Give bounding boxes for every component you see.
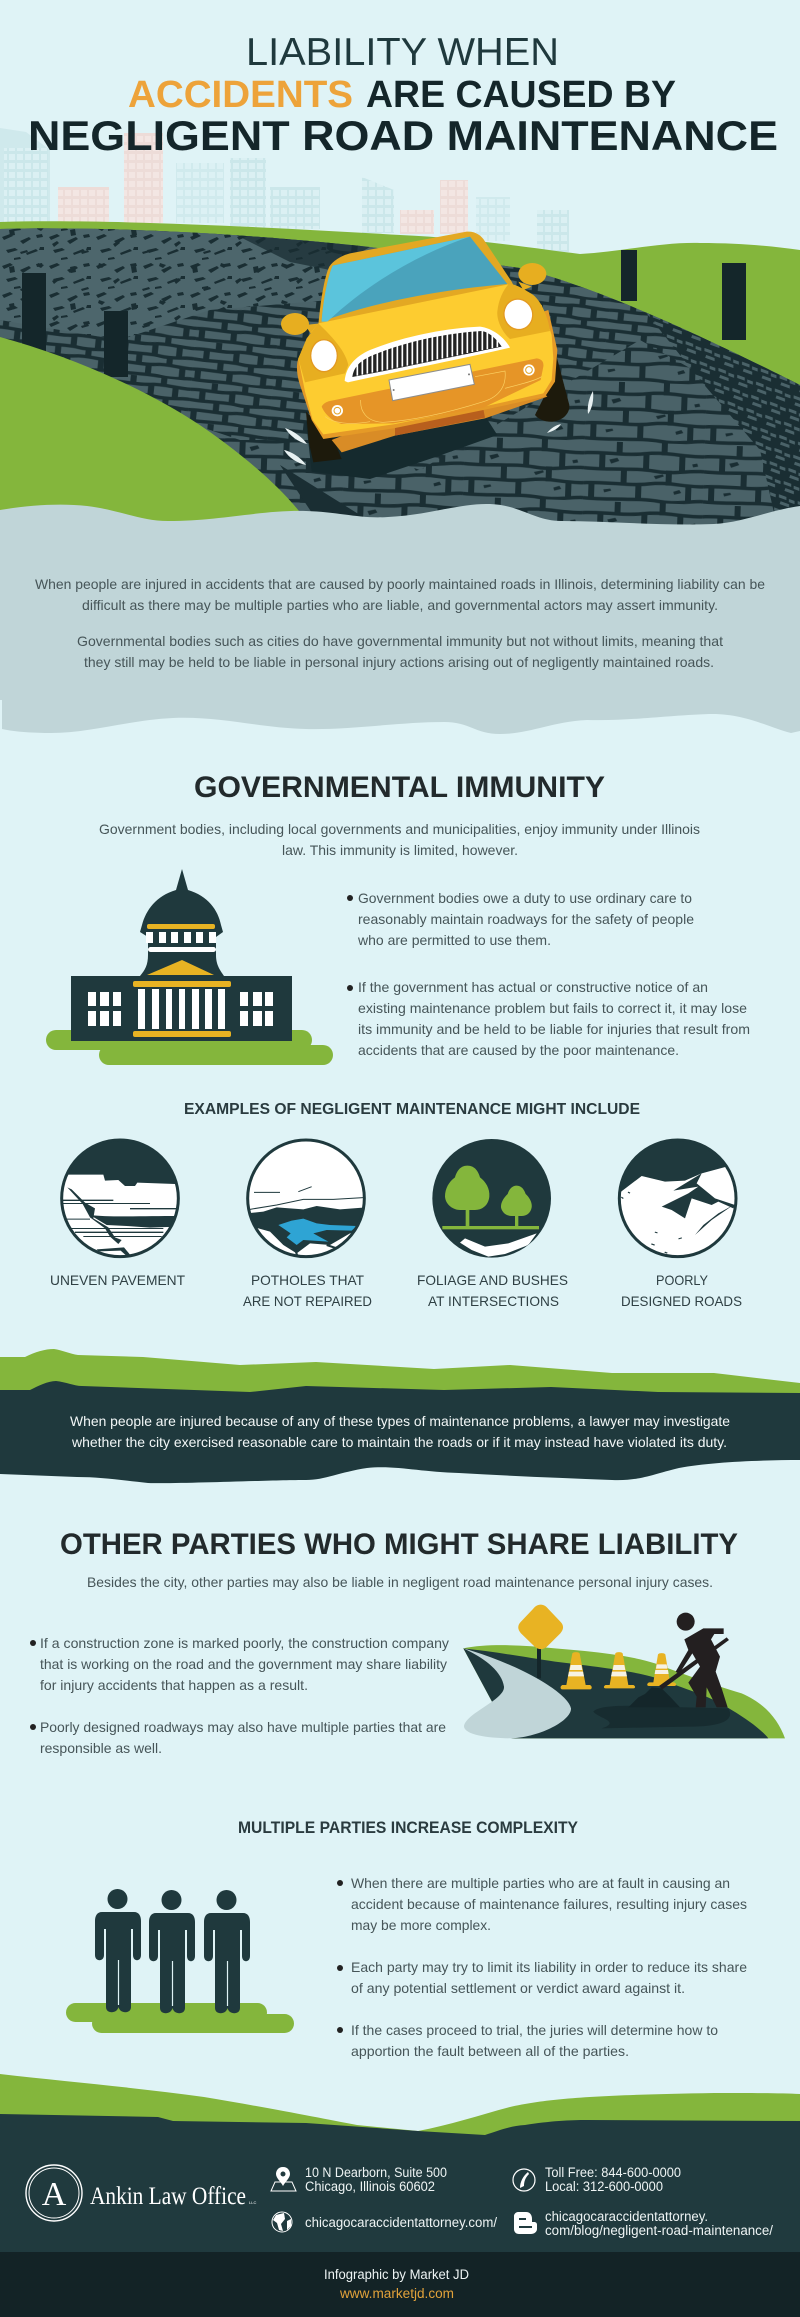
multiple parties bullet list: apportion the fault between all of the parties. (351, 2043, 629, 2059)
other parties bullet list: that is working on the road and the government may share liability (40, 1656, 447, 1672)
other parties bullet list: Poorly designed roadways may also have multiple parties that are (40, 1719, 446, 1735)
other parties intro: Besides the city, other parties may also be liable in negligent road maintenance personal injury cases. (87, 1574, 713, 1590)
hero illustration: back green hill (0, 221, 800, 420)
example labels: AT INTERSECTIONS (428, 1293, 559, 1309)
footer logo: LLC (249, 2200, 256, 2205)
example labels: POORLY (656, 1272, 709, 1288)
other parties bullet list: responsible as well. (40, 1740, 162, 1756)
address text: 10 N Dearborn, Suite 500 (305, 2165, 447, 2180)
intro text (35, 576, 765, 670)
dark panel text (70, 1413, 730, 1450)
road posts (22, 250, 746, 377)
dark wave panel (0, 1381, 800, 1483)
address text (305, 2165, 447, 2194)
immunity bullet list (347, 890, 750, 1058)
dark panel text: When people are injured because of any of these types of maintenance problems, a lawyer may investigate (70, 1413, 730, 1429)
icon: potholes (247, 1140, 367, 1258)
front green hill (0, 337, 320, 540)
multiple parties bullet list: accident because of maintenance failures, resulting injury cases (351, 1896, 747, 1912)
intro text: Governmental bodies such as cities do have governmental immunity but not without limits, meaning that (77, 633, 723, 649)
icon: foliage and bushes (432, 1139, 551, 1258)
icon: phone (513, 2169, 535, 2191)
hero illustration: cobblestone road (0, 225, 800, 540)
title: NEGLIGENT ROAD MAINTENANCE (28, 112, 778, 159)
immunity bullet list: its immunity and be held to be liable for injuries that result from (358, 1021, 750, 1037)
heading: examples: EXAMPLES OF NEGLIGENT MAINTENANCE MIGHT INCLUDE (184, 1101, 640, 1118)
title: ACCIDENTS (128, 74, 353, 116)
multiple parties bullet list: If the cases proceed to trial, the juries will determine how to (351, 2022, 718, 2038)
multiple parties bullet list: When there are multiple parties who are at fault in causing an (351, 1875, 730, 1891)
example labels: DESIGNED ROADS (621, 1293, 742, 1309)
multiple parties bullet list (337, 1875, 747, 2059)
phone text: Local: 312-600-0000 (545, 2179, 663, 2194)
icon: capitol building (46, 869, 333, 1065)
blog link text: chicagocaraccidentattorney. (545, 2209, 708, 2224)
intro text: When people are injured in accidents that are caused by poorly maintained roads in Illinois, determining liability can be (35, 576, 765, 592)
footer green hills (0, 2074, 800, 2150)
immunity bullet list: accidents that are caused by the poor maintenance. (358, 1042, 679, 1058)
icon: uneven pavement (60, 1137, 180, 1257)
example labels: FOLIAGE AND BUSHES (417, 1272, 568, 1288)
immunity bullet list: reasonably maintain roadways for the safety of people (358, 911, 694, 927)
heading: governmental immunity: GOVERNMENTAL IMMUNITY (194, 771, 605, 804)
footer panel (0, 2114, 800, 2252)
intro text: they still may be held to be liable in personal injury actions arising out of negligently maintained roads. (84, 654, 714, 670)
governmental immunity intro: law. This immunity is limited, however. (282, 842, 518, 858)
governmental immunity intro: Government bodies, including local governments and municipalities, enjoy immunity under Illinois (99, 821, 700, 837)
multiple parties bullet list: of any potential settlement or verdict award against it. (351, 1980, 685, 1996)
immunity bullet list: existing maintenance problem but fails to correct it, it may lose (358, 1000, 747, 1016)
other parties bullet list (30, 1635, 449, 1756)
illustration: construction zone (463, 1605, 785, 1738)
icon: location pin (271, 2167, 296, 2191)
tire splashes (284, 391, 593, 465)
hero illustration: skyline (0, 128, 569, 252)
immunity bullet list: who are permitted to use them. (357, 932, 551, 948)
website text: chicagocaraccidentattorney.com/ (305, 2215, 497, 2230)
blog link text: com/blog/negligent-road-maintenance/ (545, 2223, 773, 2238)
multiple parties bullet list: Each party may try to limit its liability in order to reduce its share (351, 1959, 747, 1975)
credit bar (0, 2252, 800, 2317)
other parties bullet list: for injury accidents that happen as a result. (40, 1677, 308, 1693)
phone text: Toll Free: 844-600-0000 (545, 2165, 681, 2180)
example labels: POTHOLES THAT (251, 1272, 364, 1288)
title: ARE CAUSED BY (366, 74, 676, 116)
icon: poorly designed roads (615, 1137, 742, 1257)
multiple parties bullet list: may be more complex. (351, 1917, 491, 1933)
example labels (50, 1272, 742, 1309)
blog link text (545, 2209, 773, 2238)
footer logo (26, 2165, 256, 2221)
immunity bullet list: Government bodies owe a duty to use ordinary care to (358, 890, 692, 906)
example labels: ARE NOT REPAIRED (243, 1293, 372, 1309)
footer logo: Ankin Law Office (90, 2183, 246, 2210)
credit bar: Infographic by Market JD (324, 2267, 469, 2282)
green wave (0, 1349, 800, 1400)
governmental immunity intro (99, 821, 700, 858)
yellow car (281, 232, 569, 479)
credit bar: www.marketjd.com (339, 2286, 454, 2301)
other parties bullet list: If a construction zone is marked poorly, the construction company (40, 1635, 449, 1651)
icon: three people (66, 1889, 294, 2033)
title (28, 31, 778, 159)
icon: globe (272, 2212, 292, 2232)
intro wave panel (0, 504, 800, 734)
heading: multiple parties: MULTIPLE PARTIES INCREASE COMPLEXITY (238, 1818, 579, 1837)
immunity bullet list: If the government has actual or constructive notice of an (358, 979, 708, 995)
footer logo: A (42, 2176, 67, 2213)
title: LIABILITY WHEN (246, 31, 559, 74)
intro text: difficult as there may be multiple parties who are liable, and governmental actors may assert immunity. (82, 597, 718, 613)
heading: other parties: OTHER PARTIES WHO MIGHT SHARE LIABILITY (60, 1528, 738, 1561)
phone text (545, 2165, 681, 2194)
dark panel text: whether the city exercised reasonable care to maintain the roads or if it may instead have violated its duty. (71, 1434, 727, 1450)
address text: Chicago, Illinois 60602 (305, 2179, 435, 2194)
icon: blogger (514, 2212, 537, 2234)
example labels: UNEVEN PAVEMENT (50, 1272, 185, 1288)
